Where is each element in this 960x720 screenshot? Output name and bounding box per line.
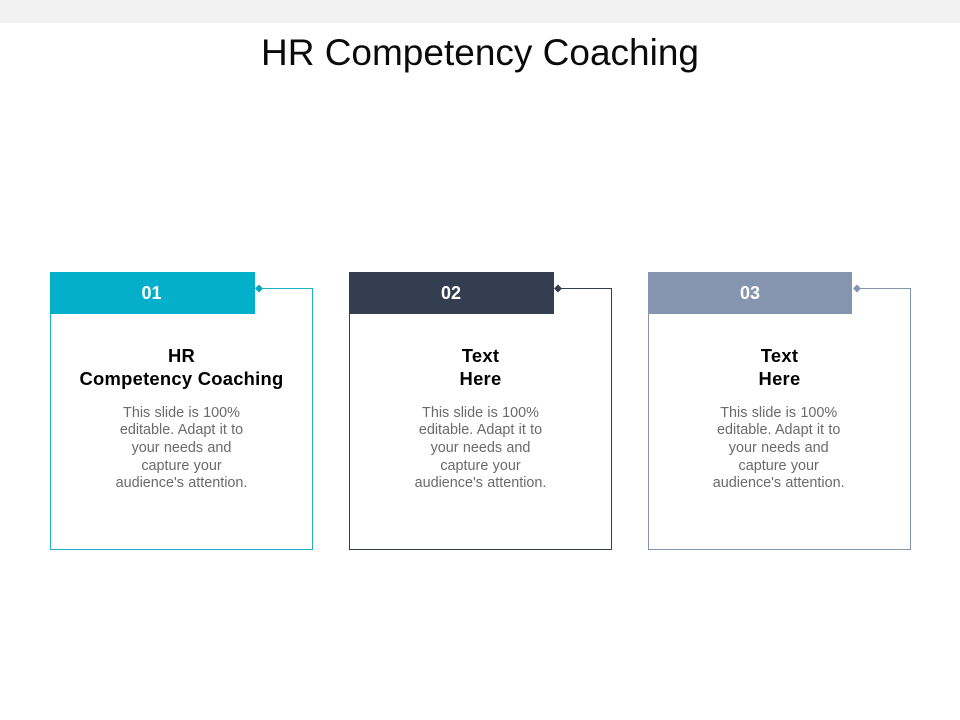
- number tab 03: [648, 272, 852, 314]
- heading 03: Here: [759, 368, 800, 389]
- number tab 02: 02: [441, 283, 461, 303]
- number tab 01: 01: [141, 283, 162, 303]
- heading 01: Competency Coaching: [79, 368, 284, 389]
- heading 03: Text: [761, 345, 798, 366]
- body text 03: your needs and: [729, 440, 829, 456]
- body text 01: [116, 405, 247, 491]
- connector frame 03: [648, 284, 911, 550]
- body text 03: audience's attention.: [713, 475, 845, 491]
- number tab 02: [349, 272, 554, 314]
- body text 02: capture your: [440, 458, 521, 474]
- body text 02: your needs and: [431, 440, 530, 456]
- panel: card 03: [648, 272, 911, 550]
- body text 02: This slide is 100%: [422, 405, 539, 421]
- body text 03: [713, 405, 845, 491]
- connector frame 02: [349, 284, 612, 550]
- panel: card 01: [50, 272, 313, 550]
- top band: [0, 0, 960, 23]
- heading 03: [759, 345, 800, 389]
- body text 02: editable. Adapt it to: [419, 422, 542, 438]
- heading 02: Text: [462, 345, 499, 366]
- body text 03: editable. Adapt it to: [717, 422, 840, 438]
- body text 03: This slide is 100%: [720, 405, 837, 421]
- body text 03: capture your: [739, 458, 819, 474]
- body text 02: audience's attention.: [415, 475, 546, 491]
- connector frame 01: [50, 284, 313, 550]
- heading 01: [79, 345, 284, 389]
- body text 01: your needs and: [132, 440, 231, 456]
- body text 01: capture your: [141, 458, 222, 474]
- heading 02: Here: [460, 368, 501, 389]
- body text 02: [415, 405, 546, 491]
- number tab 03: 03: [740, 283, 760, 303]
- heading 02: [460, 345, 501, 389]
- body text 01: This slide is 100%: [123, 405, 240, 421]
- title: HR Competency Coaching: [261, 32, 699, 73]
- heading 01: HR: [168, 345, 195, 366]
- number tab 01: [50, 272, 255, 314]
- body text 01: editable. Adapt it to: [120, 422, 243, 438]
- panel: card 02: [349, 272, 612, 550]
- body text 01: audience's attention.: [116, 475, 247, 491]
